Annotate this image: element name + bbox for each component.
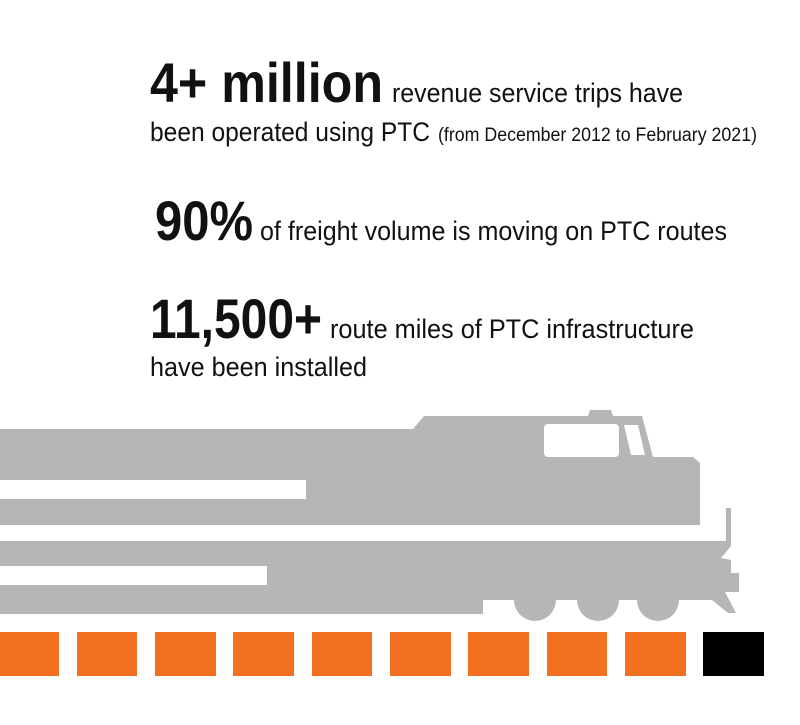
stat: 90% freight volume: [155, 189, 727, 252]
track: black end tie: [703, 632, 764, 676]
stat: 11,500+ route miles: route miles of PTC infrastructure: [330, 314, 694, 344]
stat: 11,500+ route miles: [150, 287, 694, 382]
stat: 90% freight volume: 90%: [155, 189, 253, 252]
stat: 4+ million trips: (from December 2012 to February 2021): [438, 125, 757, 146]
track: orange ties: [0, 632, 686, 676]
stat: 11,500+ route miles: have been installed: [150, 352, 367, 382]
stat: 90% freight volume: of freight volume is moving on PTC routes: [260, 216, 727, 246]
icon: locomotive silhouette: [0, 410, 739, 621]
stat: 4+ million trips: revenue service trips have: [392, 78, 683, 108]
stat: 4+ million trips: [150, 51, 757, 147]
stat: 11,500+ route miles: 11,500+: [150, 287, 322, 350]
stat: 4+ million trips: 4+ million: [150, 51, 383, 114]
stat: 4+ million trips: been operated using PTC: [150, 117, 430, 147]
